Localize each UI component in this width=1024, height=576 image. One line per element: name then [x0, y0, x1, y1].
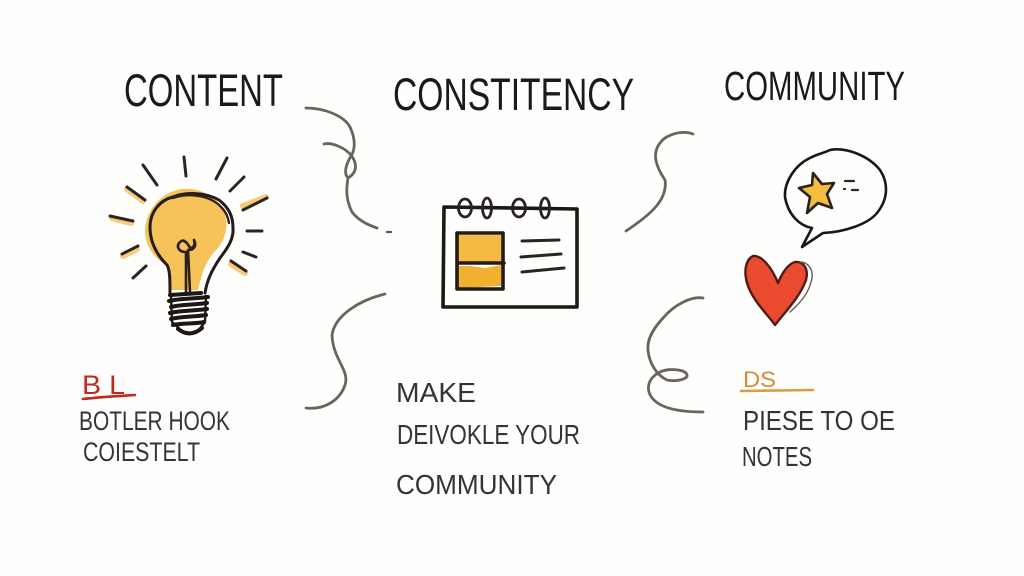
- connector: community bottom: [648, 298, 703, 412]
- line: coiestelt: COIESTELT: [83, 437, 200, 467]
- line: piese to oe: PIESE TO OE: [743, 405, 895, 436]
- line: notes: NOTES: [742, 441, 812, 472]
- ray highlights: [112, 189, 266, 273]
- star: [799, 173, 834, 213]
- screw base: [169, 293, 208, 333]
- filament: [178, 240, 195, 292]
- heading: content: CONTENT: [124, 65, 283, 116]
- speech bubble: [785, 149, 886, 247]
- calendar text lines: [521, 240, 564, 272]
- inner highlight line: [173, 195, 229, 223]
- text block: left column: [79, 370, 230, 467]
- line: botler hook: BOTLER HOOK: [79, 406, 230, 436]
- heading: consistency: CONSTITENCY: [393, 69, 634, 120]
- connector dot: [387, 231, 391, 233]
- underline: DS: [741, 390, 813, 391]
- calendar rings: [458, 198, 550, 218]
- line: community: COMMUNITY: [396, 469, 557, 500]
- icon: light bulb: [110, 157, 267, 333]
- heart offset stroke: [790, 262, 812, 312]
- icon: speech bubble with star: [785, 149, 886, 247]
- line: make: MAKE: [396, 377, 476, 408]
- label: DS: DS: [743, 367, 776, 392]
- icon: heart: [745, 256, 812, 325]
- bulb outline: [150, 194, 233, 293]
- underline: BL: [83, 395, 135, 399]
- heart fill: [745, 256, 807, 325]
- line: deivokle your: DEIVOKLE YOUR: [397, 419, 580, 450]
- text block: middle column: [396, 377, 580, 500]
- calendar inner box: [457, 233, 504, 289]
- calendar frame: [443, 207, 577, 307]
- rays: [110, 157, 267, 278]
- connector: community top: [626, 132, 693, 231]
- heading: community: COMMUNITY: [724, 63, 905, 109]
- bubble marks: [844, 181, 858, 190]
- bulb yellow wash: [145, 189, 226, 290]
- text block: right column: [741, 367, 895, 472]
- label: BL: B L: [82, 370, 125, 400]
- connector: content top: [306, 108, 377, 228]
- icon: calendar: [443, 198, 577, 307]
- connector: content bottom: [306, 294, 385, 408]
- calendar yellow blocks: [458, 235, 501, 262]
